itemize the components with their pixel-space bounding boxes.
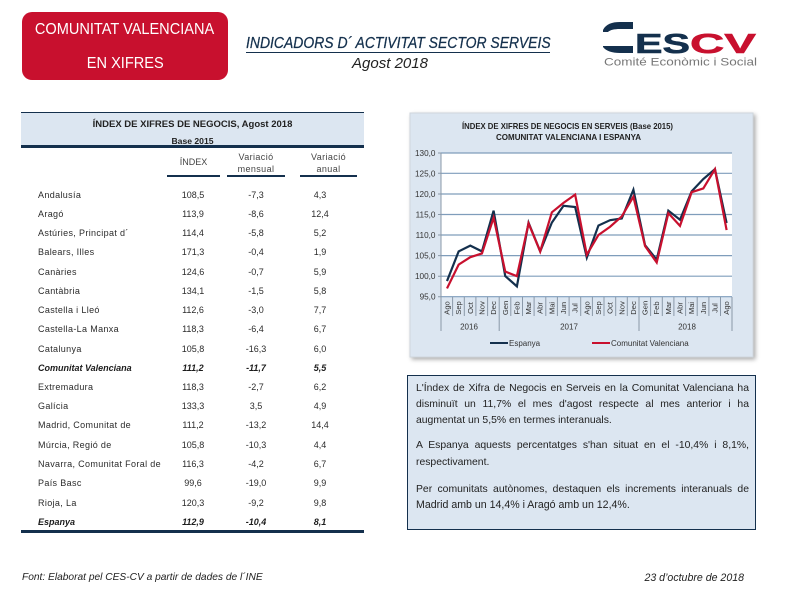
row: Castella-La Manxa: 6,7 — [314, 324, 326, 334]
logo letters ES: ES — [635, 28, 690, 59]
panel: data table — [21, 112, 364, 533]
month labels: Gen — [501, 301, 510, 315]
month labels: Feb — [652, 301, 661, 315]
row: Canaries: 5,9 — [314, 267, 326, 277]
y axis labels: 95,0 — [420, 292, 436, 302]
year labels: 2018 — [678, 322, 696, 332]
chart title: ÍNDEX DE XIFRES DE NEGOCIS EN SERVEIS (Base 2015) — [462, 120, 673, 131]
row: Madrid: Madrid, Comunitat de — [38, 420, 131, 430]
row: Pais Basc — [38, 478, 326, 488]
row: Comunitat Valenciana: 111,2 — [182, 363, 204, 373]
logo caption: Comité Econòmic i Social — [604, 56, 757, 68]
row: Balears: 171,3 — [182, 247, 204, 257]
row: Murcia: -10,3 — [246, 440, 266, 450]
row: Balears: -0,4 — [248, 247, 264, 257]
month labels: Feb — [512, 301, 521, 315]
y axis labels: 125,0 — [415, 170, 436, 178]
y axis labels: 130,0 — [415, 149, 436, 158]
badge line 1: COMUNITAT VALENCIANA — [35, 21, 215, 38]
month labels: Oct — [466, 301, 475, 314]
legend: Espanya: Espanya — [509, 339, 541, 348]
row: Navarra — [38, 459, 326, 469]
month labels: Mar — [664, 301, 673, 315]
month labels: Abr — [536, 302, 545, 314]
row: Cantabria: Cantàbria — [38, 286, 80, 296]
logo letters CV: CV — [690, 28, 757, 59]
row: Asturies: 114,4 — [182, 228, 204, 238]
title: INDICADORS D´ ACTIVITAT SECTOR SERVEIS — [246, 35, 551, 52]
row: Galicia: 133,3 — [182, 401, 204, 411]
row: Cantabria: -1,5 — [248, 286, 264, 296]
row: Castella i Lleo — [38, 305, 326, 315]
month labels: Dec — [489, 301, 498, 315]
row: Galicia — [38, 401, 326, 411]
month labels: Mar — [524, 301, 533, 315]
row: Rioja: 9,8 — [314, 498, 326, 508]
column header: variacio mensual: Variació — [238, 152, 274, 162]
row: Balears — [38, 247, 326, 257]
row: Canaries: -0,7 — [248, 267, 264, 277]
legend: Espanya — [490, 339, 541, 348]
month labels: Jun — [559, 302, 568, 314]
row: Navarra: 116,3 — [182, 459, 204, 469]
axis ticks and year separators — [438, 153, 732, 331]
y axis labels: 120,0 — [415, 190, 436, 199]
year labels — [460, 322, 696, 332]
row: Pais Basc: 99,6 — [184, 478, 202, 488]
row: Galicia: 4,9 — [314, 401, 326, 411]
row: Castella i Lleo: 7,7 — [314, 305, 326, 315]
row: Rioja: Rioja, La — [38, 498, 77, 508]
row: Castella-La Manxa: Castella-La Manxa — [38, 324, 119, 334]
chart title: COMUNITAT VALENCIANA I ESPANYA — [496, 132, 641, 142]
row: Arago: 12,4 — [311, 209, 329, 219]
row: Extremadura — [38, 382, 326, 392]
subtitle: Agost 2018 — [352, 55, 428, 72]
month labels — [442, 301, 731, 315]
chart title — [462, 120, 673, 142]
row: Arago: -8,6 — [248, 209, 264, 219]
row: Andalusia: 108,5 — [182, 190, 204, 200]
column header: index — [167, 156, 220, 177]
column header: index: ÍNDEX — [180, 157, 207, 167]
row: Balears: 1,9 — [314, 247, 326, 257]
logo C top arc — [603, 22, 633, 32]
row: Castella-La Manxa — [38, 324, 326, 334]
month labels: Jun — [699, 302, 708, 314]
month labels: Ago — [582, 301, 591, 315]
row: Andalusia: Andalusía — [38, 190, 81, 200]
row: Arago — [38, 209, 329, 219]
row: Murcia: Múrcia, Regió de — [38, 440, 112, 450]
y axis labels: 110,0 — [416, 231, 436, 240]
row: Comunitat Valenciana — [38, 363, 326, 373]
row: Arago: Aragó — [38, 209, 64, 219]
paragraph 1: disminuït un 11,7% el mes d'agost respecte al mes anterior i ha — [416, 399, 749, 410]
row: Extremadura: 118,3 — [182, 382, 204, 392]
row: Cantabria: 134,1 — [182, 286, 204, 296]
month labels: Jul — [571, 303, 580, 313]
row: Comunitat Valenciana: 5,5 — [314, 363, 326, 373]
year labels: 2017 — [560, 322, 578, 332]
row: Pais Basc: 9,9 — [314, 478, 326, 488]
row: Madrid — [38, 420, 329, 430]
badge: Comunitat Valenciana en xifres — [22, 12, 228, 80]
month labels: Sep — [454, 301, 463, 315]
table header band — [21, 112, 364, 148]
row: Murcia: 105,8 — [182, 440, 204, 450]
row: Rioja — [38, 498, 326, 508]
row: Extremadura: 6,2 — [314, 382, 326, 392]
y axis labels — [415, 149, 436, 302]
line: Comunitat Valenciana — [447, 169, 727, 288]
table subheading: Base 2015 — [171, 136, 214, 146]
month labels: Mai — [687, 302, 696, 314]
row: Murcia — [38, 440, 326, 450]
row: Rioja: -9,2 — [248, 498, 264, 508]
footer: date: 23 d’octubre de 2018 — [644, 572, 744, 584]
column header: variacio mensual — [227, 151, 285, 177]
table bottom rule — [21, 530, 364, 533]
row: Asturies: Astúries, Principat d´ — [38, 228, 129, 238]
row: Asturies — [38, 228, 326, 238]
logo: CES CV — [603, 22, 757, 68]
chart background — [410, 113, 753, 357]
row: Espanya: 112,9 — [182, 517, 204, 527]
month labels: Nov — [478, 301, 486, 315]
row: Cantabria: 5,8 — [314, 286, 326, 296]
row: Andalusia: -7,3 — [248, 190, 264, 200]
row: Arago: 113,9 — [182, 209, 204, 219]
column header: variacio anual: Variació — [311, 152, 346, 162]
row: Andalusia — [38, 190, 326, 200]
y axis labels: 115,0 — [416, 210, 436, 220]
row: Canaries — [38, 267, 326, 277]
row: Cantabria — [38, 286, 326, 296]
logo C bottom arc — [603, 46, 633, 53]
row: Pais Basc: -19,0 — [246, 478, 266, 488]
month labels: Dec — [629, 301, 638, 315]
row: Madrid: 14,4 — [311, 420, 329, 430]
row: Espanya — [38, 517, 326, 527]
month labels: Jul — [710, 303, 720, 313]
row: Canaries: Canàries — [38, 267, 77, 277]
month labels: Ago — [442, 301, 452, 315]
row: Espanya: 8,1 — [314, 517, 326, 527]
paragraph 3 — [416, 484, 749, 511]
row: Balears: Balears, Illes — [38, 247, 94, 257]
row: Pais Basc: País Basc — [38, 478, 82, 488]
text box: commentary — [407, 375, 756, 530]
month labels: Mai — [547, 302, 556, 314]
row: Espanya: -10,4 — [246, 517, 266, 527]
legend: Comunitat Valenciana: Comunitat Valenciana — [611, 339, 689, 348]
row: Madrid: -13,2 — [246, 420, 266, 430]
table heading: ÍNDEX DE XIFRES DE NEGOCIS, Agost 2018 — [93, 119, 292, 130]
row: Castella i Lleo: -3,0 — [248, 305, 264, 315]
paragraph 2 — [416, 440, 749, 468]
paragraph 2: respectivament. — [416, 457, 489, 468]
row: Extremadura: -2,7 — [248, 382, 264, 392]
row: Asturies: -5,8 — [248, 228, 264, 238]
row: Murcia: 4,4 — [314, 440, 326, 450]
month labels: Abr — [676, 302, 684, 314]
row: Catalunya: -16,3 — [246, 344, 266, 354]
column header: variacio mensual: mensual — [238, 164, 274, 174]
row: Castella-La Manxa: -6,4 — [248, 324, 264, 334]
row: Canaries: 124,6 — [182, 267, 204, 277]
month labels: Gen — [641, 301, 650, 315]
row: Catalunya — [38, 344, 326, 354]
column header: variacio anual: anual — [316, 164, 341, 174]
row: Andalusia: 4,3 — [314, 190, 326, 200]
paragraph 3: Madrid amb un 14,4% i Aragó amb un 12,4%. — [416, 499, 630, 511]
month labels: Oct — [606, 301, 615, 314]
footer: source: Font: Elaborat pel CES-CV a partir de dades de l´INE — [22, 572, 263, 583]
column header: variacio anual — [300, 151, 357, 177]
row: Navarra: Navarra, Comunitat Foral de — [38, 459, 161, 469]
line: Espanya — [447, 169, 727, 286]
row: Galicia: Galícia — [38, 401, 68, 411]
paragraph 2: A Espanya aquests percentatges s'han situat en el -10,4% i 8,1%, — [416, 440, 749, 451]
row: Navarra: -4,2 — [248, 459, 264, 469]
row: Comunitat Valenciana: Comunitat Valenciana — [38, 363, 132, 373]
row: Navarra: 6,7 — [314, 459, 326, 469]
row: Extremadura: Extremadura — [38, 382, 93, 392]
year labels: 2016 — [460, 322, 478, 332]
paragraph 1 — [416, 382, 750, 426]
badge line 2: EN XIFRES — [87, 55, 163, 72]
paragraph 3: Per comunitats autònomes, destaquen els increments interanuals de — [416, 484, 749, 495]
row: Catalunya: 6,0 — [314, 344, 326, 354]
month labels: Sep — [594, 301, 603, 315]
y axis labels: 100,0 — [415, 272, 436, 281]
gridlines — [441, 153, 732, 297]
row: Castella-La Manxa: 118,3 — [182, 324, 204, 334]
row: Rioja: 120,3 — [182, 498, 204, 508]
row: Galicia: 3,5 — [250, 401, 262, 411]
paragraph 1: augmentat un 5,5% en termes interanuals. — [416, 415, 612, 426]
row: Comunitat Valenciana: -11,7 — [246, 363, 266, 373]
row: Catalunya: Catalunya — [38, 344, 82, 354]
row: Castella i Lleo: 112,6 — [182, 305, 204, 315]
month labels: Nov — [617, 301, 626, 315]
row: Castella i Lleo: Castella i Lleó — [38, 305, 100, 315]
y axis labels: 105,0 — [415, 252, 436, 260]
row: Espanya: Espanya — [38, 517, 75, 527]
plot area — [441, 153, 732, 297]
row: Madrid: 111,2 — [182, 420, 204, 430]
row: Catalunya: 105,8 — [182, 344, 204, 354]
paragraph 1: L'Índex de Xifra de Negocis en Serveis en la Comunitat Valenciana ha — [416, 383, 749, 394]
row: Asturies: 5,2 — [314, 228, 326, 238]
month labels: Ago — [722, 301, 731, 315]
